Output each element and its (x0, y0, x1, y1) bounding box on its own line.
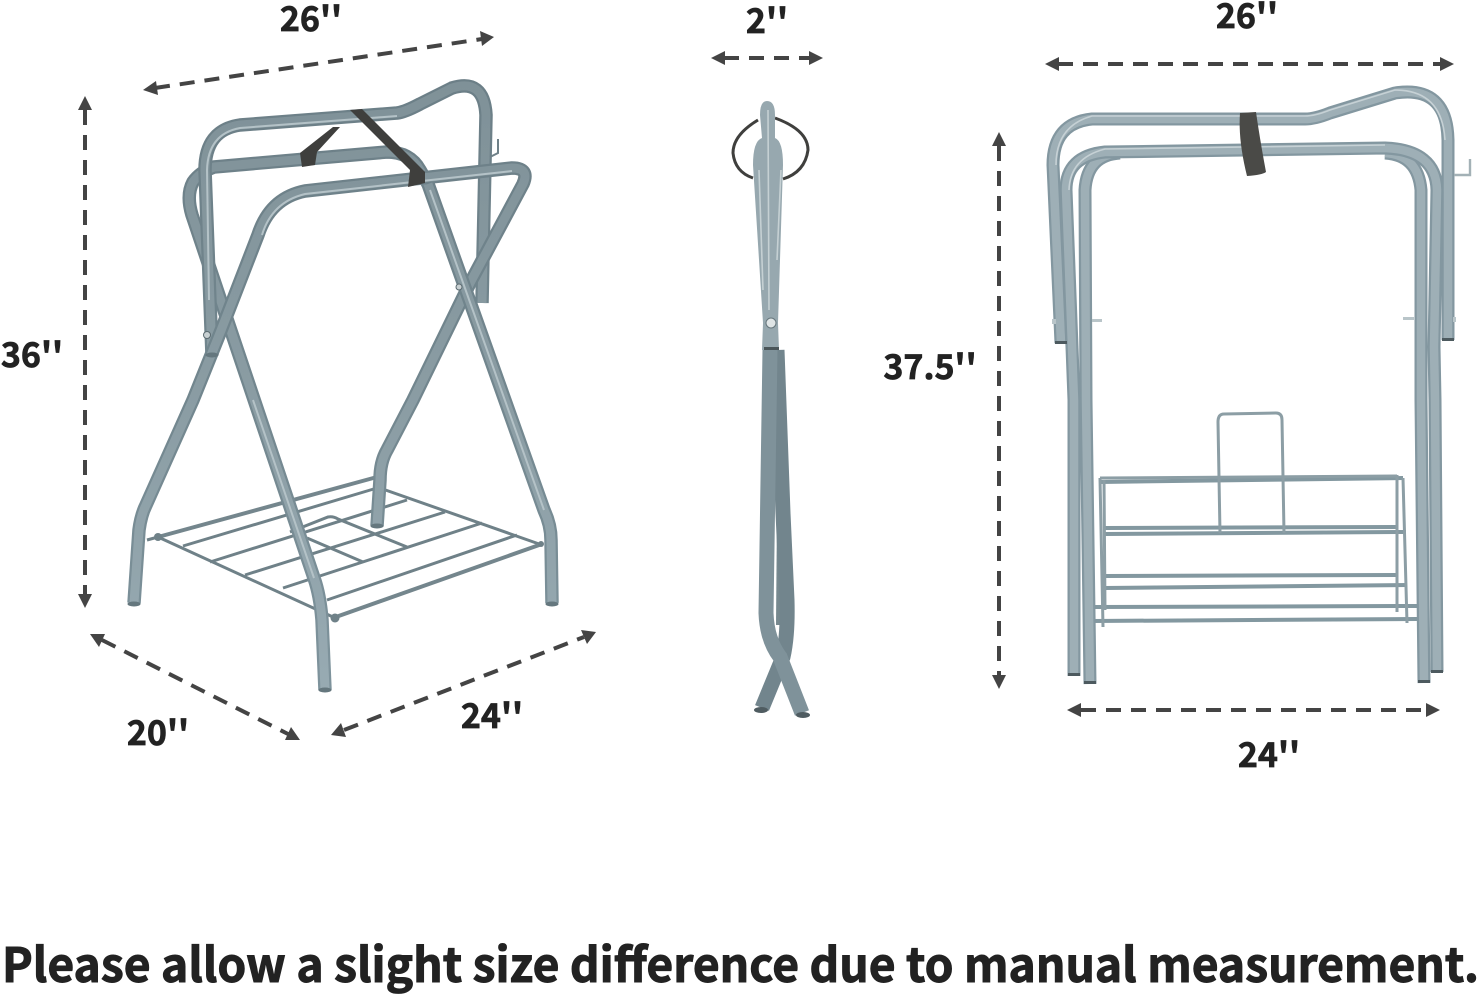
lower tubes (762, 350, 802, 713)
dimension: base width, angled view: 24'' (461, 689, 523, 738)
upper tube body (753, 101, 783, 350)
middle frame (1066, 145, 1437, 676)
dimension: folded thickness (711, 0, 823, 65)
dimension: base width, angled view (331, 630, 596, 738)
foot caps and pins (1055, 338, 1454, 684)
back frame (1053, 90, 1448, 343)
dimension: height, front view: 37.5'' (883, 340, 977, 389)
third frame (1085, 153, 1424, 684)
dimension: height, front view (883, 132, 1006, 689)
strap loop (733, 118, 808, 179)
wall hook (490, 139, 498, 157)
second frame, front tube (428, 184, 552, 603)
panel: angled view of rack (128, 86, 558, 693)
wall hook (1454, 159, 1470, 175)
wing nuts (1052, 317, 1456, 324)
dimension: top width, front view (1045, 0, 1454, 71)
front frame (134, 168, 525, 603)
dimension: depth, angled view (90, 634, 300, 755)
pivot bolts (204, 284, 462, 338)
dimension: base width, front view (1067, 703, 1440, 777)
dimension: height, angled view: 36'' (1, 328, 63, 377)
dimension: base width, front view: 24'' (1238, 728, 1300, 777)
back frame (205, 86, 486, 355)
second frame, rear tube (189, 152, 428, 690)
tube highlights (759, 110, 781, 310)
dimension: top width, angled view (143, 0, 494, 95)
pivot bolt (766, 318, 776, 328)
joint shadow (764, 347, 779, 350)
foot caps (128, 352, 558, 692)
wire basket (1093, 413, 1417, 627)
dimension: depth, angled view: 20'' (127, 706, 189, 755)
dimension: height, angled view (1, 96, 92, 608)
inner wire shelf (778, 510, 779, 625)
panel: folded side view (733, 101, 810, 718)
leather strap (1240, 112, 1266, 176)
foot caps (754, 707, 810, 718)
panel: front view of rack (1052, 90, 1470, 684)
leather strap (300, 109, 425, 187)
wire shelf (147, 477, 544, 622)
front leg highlight (253, 400, 314, 578)
